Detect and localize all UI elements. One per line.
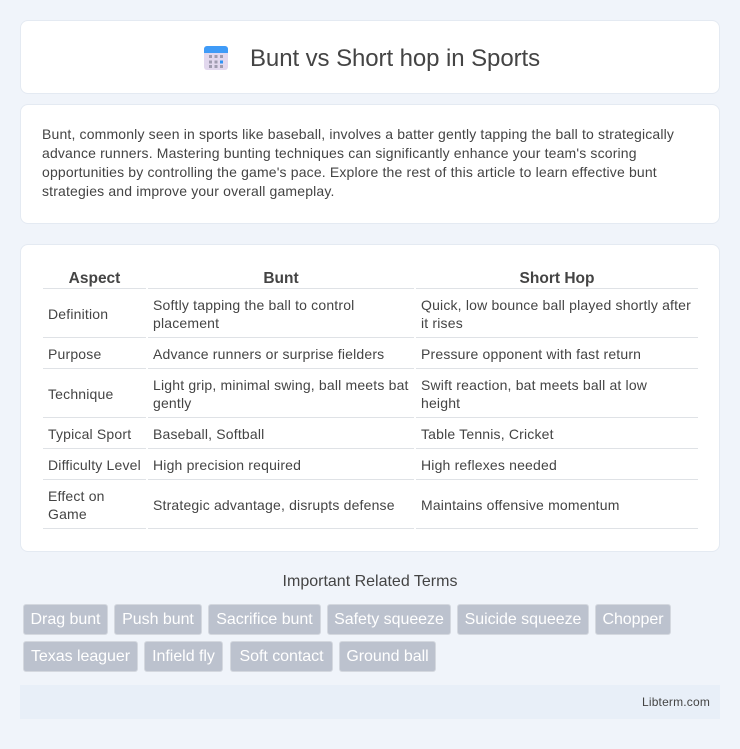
row: typical sport: Typical Sport (48, 426, 131, 442)
tag (23, 604, 108, 635)
row: technique: gently (153, 395, 191, 411)
row: difficulty level (48, 457, 557, 473)
tag (114, 604, 202, 635)
row: typical sport: Table Tennis, Cricket (421, 426, 554, 442)
row: effect on game: Maintains offensive momentum (421, 497, 620, 513)
intro paragraph (42, 126, 674, 199)
row: technique: Technique (48, 386, 113, 402)
row: typical sport (48, 426, 554, 442)
intro text card (20, 104, 720, 224)
tag: Sacrifice bunt (216, 611, 313, 628)
intro paragraph: opportunities by controlling the game's pace. Explore the rest of this article to learn effective bunt (42, 164, 657, 180)
table header (69, 270, 594, 287)
intro paragraph: strategies and improve your overall gameplay. (42, 183, 335, 199)
tag: Safety squeeze (334, 611, 444, 628)
row: purpose: Purpose (48, 346, 101, 362)
row: technique: height (421, 395, 460, 411)
row: difficulty level: High precision required (153, 457, 301, 473)
comparison table card (20, 244, 720, 552)
tag (339, 641, 436, 672)
row: definition: Definition (48, 306, 108, 322)
related terms heading: Important Related Terms (283, 573, 457, 590)
tag: Infield fly (152, 648, 215, 665)
row: definition: placement (153, 315, 219, 331)
row: definition: Quick, low bounce ball played shortly after (421, 297, 691, 313)
footer credit: Libterm.com (642, 695, 710, 709)
footer bar (20, 685, 720, 719)
intro paragraph: advance runners. Mastering bunting techniques can significantly enhance your team's scoring (42, 145, 637, 161)
row: difficulty level: High reflexes needed (421, 457, 557, 473)
icon: calendar (204, 46, 228, 70)
row: effect on game: Strategic advantage, disrupts defense (153, 497, 395, 513)
tag: Push bunt (122, 611, 194, 628)
tag (457, 604, 589, 635)
row: difficulty level: Difficulty Level (48, 457, 141, 473)
intro paragraph: Bunt, commonly seen in sports like baseball, involves a batter gently tapping the ball to strategically (42, 126, 674, 142)
row: purpose: Pressure opponent with fast return (421, 346, 641, 362)
tag (208, 604, 321, 635)
row: definition: it rises (421, 315, 463, 331)
tag (23, 641, 138, 672)
row: effect on game (48, 488, 620, 522)
related terms tags (23, 604, 671, 672)
table header: Short Hop (520, 270, 594, 287)
row: purpose (48, 346, 641, 362)
tag: Texas leaguer (31, 648, 130, 665)
tag: Drag bunt (31, 611, 100, 628)
row: technique: Light grip, minimal swing, ball meets bat (153, 377, 409, 393)
row: technique (48, 377, 647, 411)
header card (20, 20, 720, 94)
row: definition: Softly tapping the ball to control (153, 297, 354, 313)
tag (144, 641, 223, 672)
table contents (43, 270, 698, 529)
row: typical sport: Baseball, Softball (153, 426, 264, 442)
title: Bunt vs Short hop in Sports (250, 45, 540, 72)
row: effect on game: Effect on (48, 488, 105, 504)
tag: Ground ball (346, 648, 429, 665)
tag (327, 604, 451, 635)
tag: Soft contact (239, 648, 324, 665)
tag (230, 641, 333, 672)
tag (595, 604, 671, 635)
row: definition (48, 297, 691, 331)
row: effect on game: Game (48, 506, 87, 522)
tag: Suicide squeeze (465, 611, 581, 628)
table header: Aspect (69, 270, 120, 287)
tag: Chopper (602, 611, 664, 628)
table header: Bunt (263, 270, 299, 287)
row: purpose: Advance runners or surprise fielders (153, 346, 384, 362)
row: technique: Swift reaction, bat meets ball at low (421, 377, 647, 393)
